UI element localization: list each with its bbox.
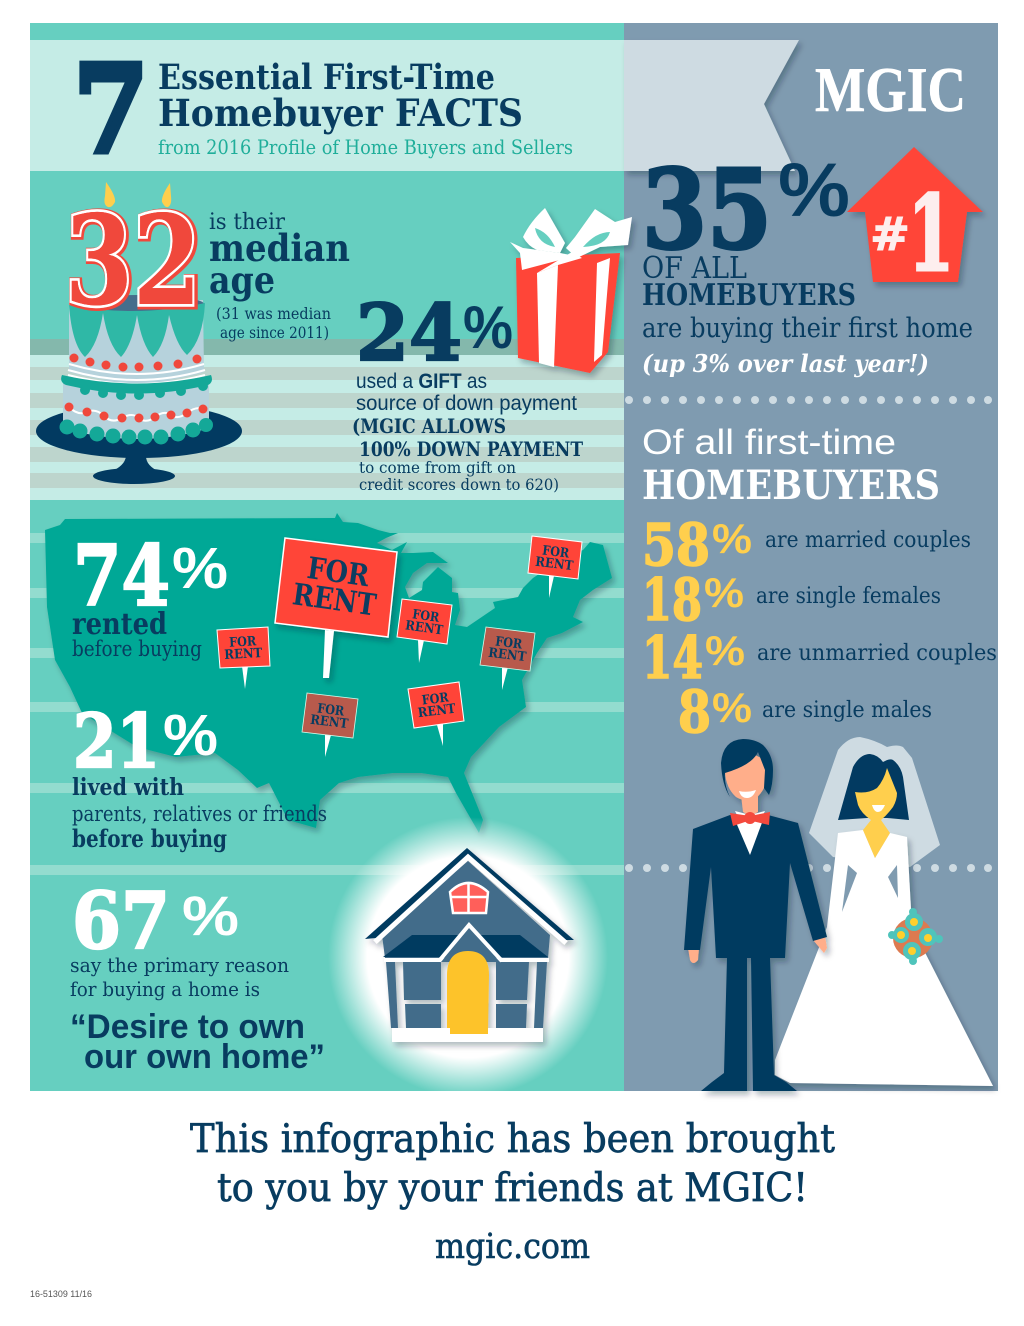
text: 35% of all homebuyers: % — [778, 148, 850, 233]
sign: for rent midwest — [397, 599, 452, 663]
text: 21% lived with family: lived with — [72, 774, 184, 801]
sign: for rent midwest: RENT — [404, 618, 444, 639]
text: 24% gift: to come from gift on — [359, 458, 516, 477]
stat list: buyer types: are married couples — [765, 528, 971, 553]
sign: for rent south: RENT — [417, 702, 457, 721]
stat list: buyer types: % — [712, 684, 752, 731]
sign: for rent central — [302, 693, 358, 757]
text: 67% reason: 67 — [72, 876, 170, 967]
text: 67% reason: for buying a home is — [70, 977, 260, 1001]
text: 35% of all homebuyers: OF ALL — [642, 251, 747, 286]
text: median age: (31 was median — [216, 304, 331, 323]
bouquet — [888, 908, 943, 965]
stat list: buyer types: % — [712, 515, 752, 562]
text: median age: age — [209, 258, 275, 302]
cake candles: 32: 32 — [65, 189, 201, 334]
heading: of all first-time homebuyers: HOMEBUYERS — [642, 462, 940, 509]
text: 24% gift: credit scores down to 620) — [359, 475, 559, 494]
heading: of all first-time homebuyers — [642, 423, 940, 509]
text: 74% rented: rented — [72, 607, 167, 642]
stat list: buyer types — [642, 511, 997, 746]
sign: for rent east: FOR — [494, 634, 523, 653]
text: 35% of all homebuyers — [642, 145, 973, 378]
stat list: buyer types: 18 — [642, 566, 702, 634]
footer message: mgic.com — [435, 1227, 590, 1267]
stat list: buyer types: % — [705, 627, 745, 674]
title: Homebuyer FACTS — [158, 91, 523, 135]
illustration: groom — [684, 739, 827, 1091]
sign: for rent large — [275, 538, 397, 678]
illustration: bride — [775, 737, 993, 1086]
icon: house with glow — [328, 817, 608, 1097]
text: 67% reason — [70, 876, 325, 1076]
sign: for rent east: RENT — [487, 646, 527, 665]
stat list: buyer types: 58 — [642, 511, 710, 579]
sign: for rent large: RENT — [290, 577, 379, 624]
sign: for rent west: RENT — [224, 646, 263, 663]
text: 24% gift: 100% DOWN PAYMENT — [359, 437, 583, 461]
footer message: to you by your friends at MGIC! — [217, 1166, 808, 1211]
icon: gift box — [510, 208, 632, 373]
sign: for rent northeast: FOR — [541, 543, 570, 562]
icon: birthday cake — [36, 182, 242, 484]
stat list: buyer types: 14 — [642, 624, 703, 692]
text: median age: age since 2011) — [220, 323, 329, 342]
text: 21% lived with family: parents, relatives or friends — [72, 802, 327, 826]
title — [73, 37, 573, 181]
text: 24% gift: used a GIFT as — [356, 370, 487, 393]
text: 67% reason: our own home” — [84, 1038, 325, 1076]
text: 21% lived with family — [72, 699, 327, 853]
text: 21% lived with family: % — [163, 703, 218, 768]
icon: #1 house arrow: # — [870, 207, 910, 261]
text: 24% gift: (MGIC ALLOWS — [352, 414, 506, 438]
stat list: buyer types: are single males — [762, 698, 932, 723]
text: 74% rented: before buying — [72, 637, 202, 661]
text: 35% of all homebuyers: 35 — [642, 145, 772, 274]
sign: for rent large: FOR — [305, 551, 372, 594]
sign: for rent central: RENT — [309, 713, 349, 732]
header band — [30, 40, 799, 171]
footer message: This infographic has been brought — [190, 1117, 835, 1162]
title: 7 — [73, 37, 149, 181]
stat list: buyer types: % — [704, 569, 744, 616]
icon: #1 house arrow: 1 — [908, 172, 954, 295]
footnote: job code: 16-51309 11/16 — [30, 1289, 92, 1299]
sign: for rent west — [217, 627, 270, 689]
stat list: buyer types: 8 — [678, 678, 711, 746]
sign: for rent west: FOR — [229, 634, 257, 651]
dotted divider — [625, 396, 992, 404]
sign: for rent northeast — [528, 536, 582, 598]
text: 35% of all homebuyers: are buying their first home — [642, 313, 973, 344]
text: 21% lived with family: before buying — [72, 824, 227, 853]
panel: right slate background — [624, 23, 998, 1091]
text: 74% rented: 74 — [73, 527, 170, 625]
icon: #1 house arrow — [847, 147, 983, 295]
sign: for rent south: FOR — [421, 690, 450, 709]
text: 24% gift: 24 — [356, 288, 462, 379]
text: median age — [209, 210, 350, 342]
sign: for rent east — [480, 627, 535, 690]
sign: for rent south — [408, 682, 464, 746]
text: 35% of all homebuyers: HOMEBUYERS — [642, 278, 856, 313]
panel: left teal background — [30, 23, 624, 1091]
stat list: buyer types: are single females — [756, 584, 941, 609]
title: Essential First-Time — [158, 57, 495, 98]
sign: for rent central: FOR — [316, 701, 345, 720]
stat list: buyer types: are unmarried couples — [757, 641, 997, 666]
text: 67% reason: say the primary reason — [70, 953, 289, 977]
text: 24% gift: % — [463, 294, 513, 361]
cake candles: 32: 32 — [66, 190, 203, 335]
footer message — [190, 1117, 835, 1267]
text: 74% rented — [72, 527, 228, 661]
text: 35% of all homebuyers: (up 3% over last year!) — [642, 349, 929, 378]
sign: for rent midwest: FOR — [411, 607, 440, 626]
text: 21% lived with family: 21 — [73, 699, 160, 785]
heading: of all first-time homebuyers: Of all first-time — [642, 423, 896, 462]
text: median age: is their — [209, 210, 285, 235]
map: United States — [45, 513, 612, 833]
text: 24% gift — [352, 288, 583, 494]
text: 24% gift: source of down payment — [356, 392, 577, 415]
text: median age: median — [209, 226, 350, 270]
sign: for rent northeast: RENT — [534, 555, 574, 574]
text: 67% reason: % — [182, 884, 239, 947]
text: 74% rented: % — [172, 536, 228, 601]
cake candles: 32: 32 — [65, 189, 201, 334]
title: from 2016 Profile of Home Buyers and Sellers — [158, 135, 573, 159]
text: 67% reason: “Desire to own — [70, 1008, 305, 1046]
logo: MGIC: MGIC — [815, 54, 966, 125]
dotted divider lower — [625, 864, 992, 872]
